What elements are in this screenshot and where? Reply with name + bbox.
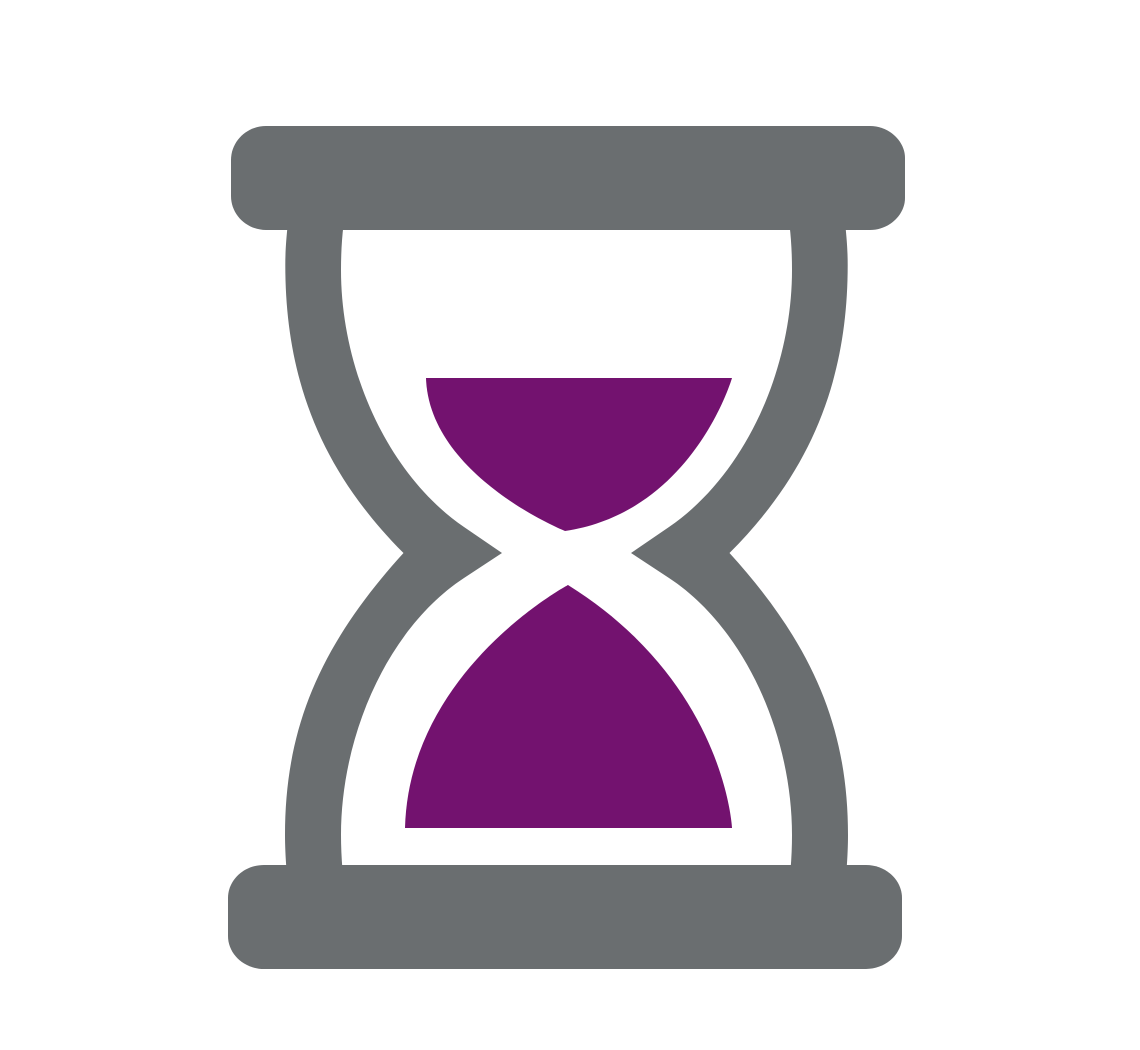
lower sand <box>405 585 732 828</box>
top cap <box>231 126 905 230</box>
upper sand <box>426 378 732 531</box>
hourglass frame outline <box>285 225 848 870</box>
bottom cap <box>228 865 902 969</box>
